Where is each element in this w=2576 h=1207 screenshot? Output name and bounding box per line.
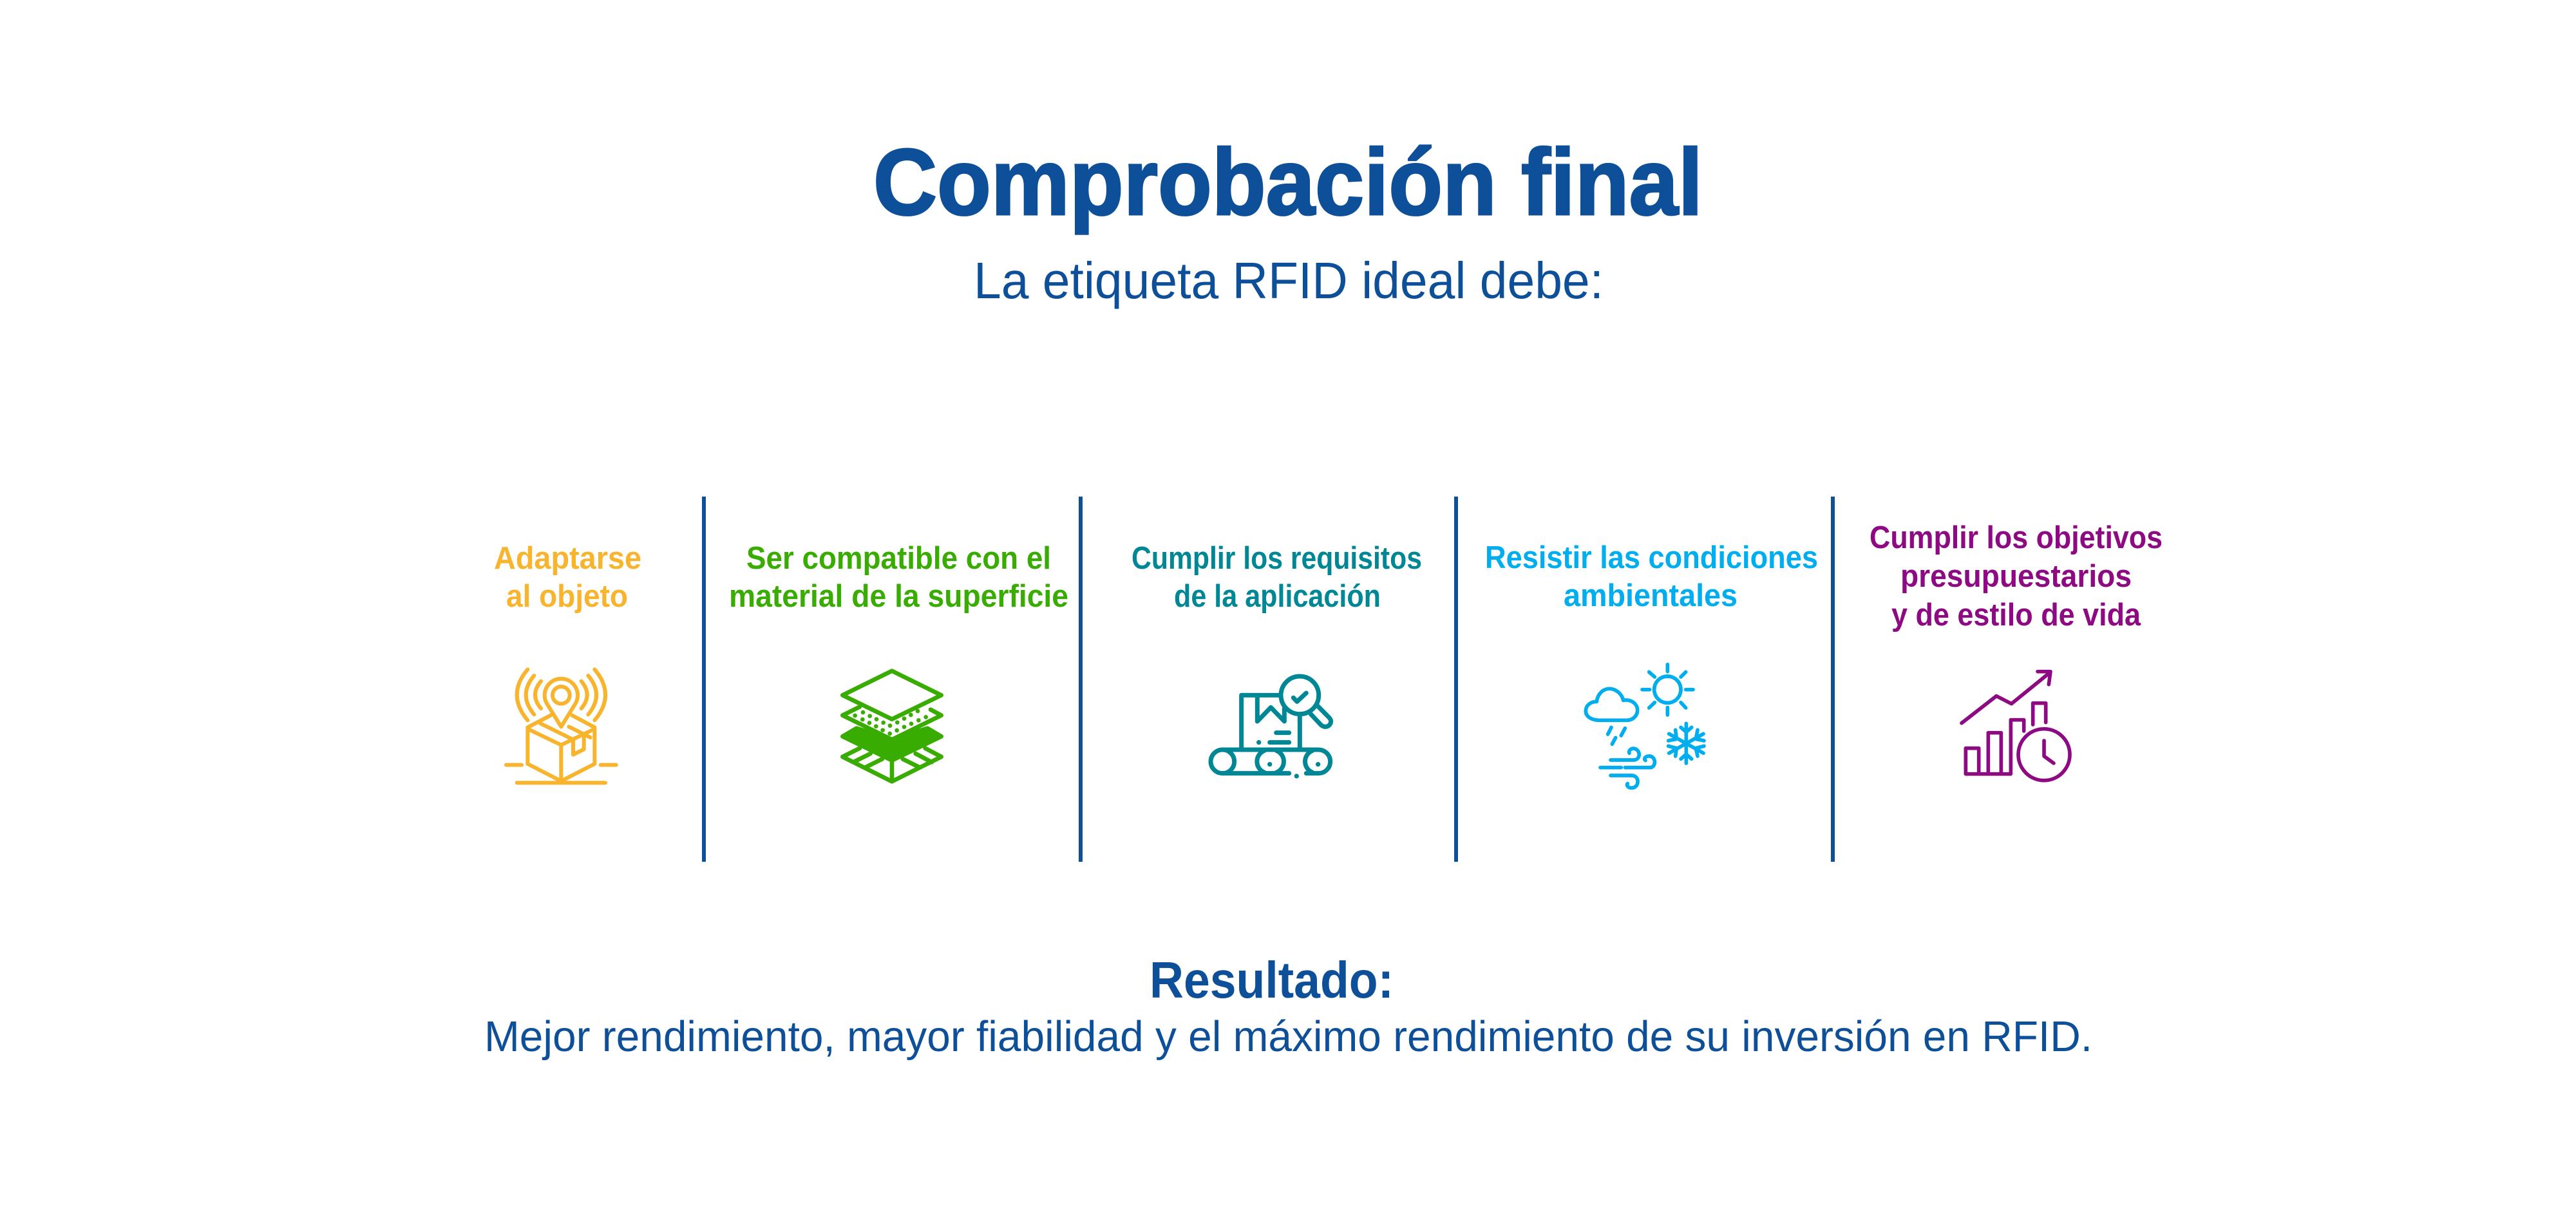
panel: condiciones ambientales bbox=[1485, 540, 1818, 788]
label: adaptarse: al objeto bbox=[506, 579, 628, 614]
title: Comprobación final bbox=[873, 129, 1703, 234]
icon: weather bbox=[1586, 665, 1704, 788]
label: ambientales: ambientales bbox=[1564, 578, 1738, 613]
label: compatible bbox=[729, 541, 1068, 614]
panel: objetivos presupuestarios bbox=[1870, 520, 2163, 781]
column dividers bbox=[702, 497, 1835, 862]
panel: adaptarse al objeto bbox=[494, 541, 641, 783]
label: ambientales bbox=[1485, 540, 1818, 613]
label: presupuesto: y de estilo de vida bbox=[1891, 598, 2141, 632]
panel: compatible con el material bbox=[729, 541, 1068, 781]
result heading: Resultado: bbox=[1150, 951, 1394, 1009]
icon: material layers bbox=[842, 671, 942, 781]
label: presupuesto bbox=[1870, 520, 2163, 632]
label: compatible: material de la superficie bbox=[729, 579, 1068, 614]
result text: Mejor rendimiento, mayor fiabilidad y el máximo rendimiento de su inversión en RFID. bbox=[484, 1012, 2092, 1061]
subtitle: La etiqueta RFID ideal debe: bbox=[974, 252, 1604, 309]
icon: box with location pin bbox=[506, 669, 616, 783]
label: presupuesto: Cumplir los objetivos bbox=[1870, 520, 2163, 555]
label: presupuesto: presupuestarios bbox=[1900, 559, 2132, 594]
label: adaptarse: Adaptarse bbox=[494, 541, 641, 576]
label: requisitos: Cumplir los requisitos bbox=[1132, 541, 1422, 576]
label: compatible: Ser compatible con el bbox=[746, 541, 1051, 576]
panel: requisitos de la aplicacion bbox=[1132, 541, 1422, 779]
label: requisitos bbox=[1132, 541, 1422, 614]
label: adaptarse bbox=[494, 541, 641, 614]
label: ambientales: Resistir las condiciones bbox=[1485, 540, 1818, 575]
label: requisitos: de la aplicación bbox=[1174, 579, 1381, 614]
icon: chart with clock bbox=[1962, 672, 2070, 781]
icon: conveyor with magnifier bbox=[1211, 676, 1331, 779]
